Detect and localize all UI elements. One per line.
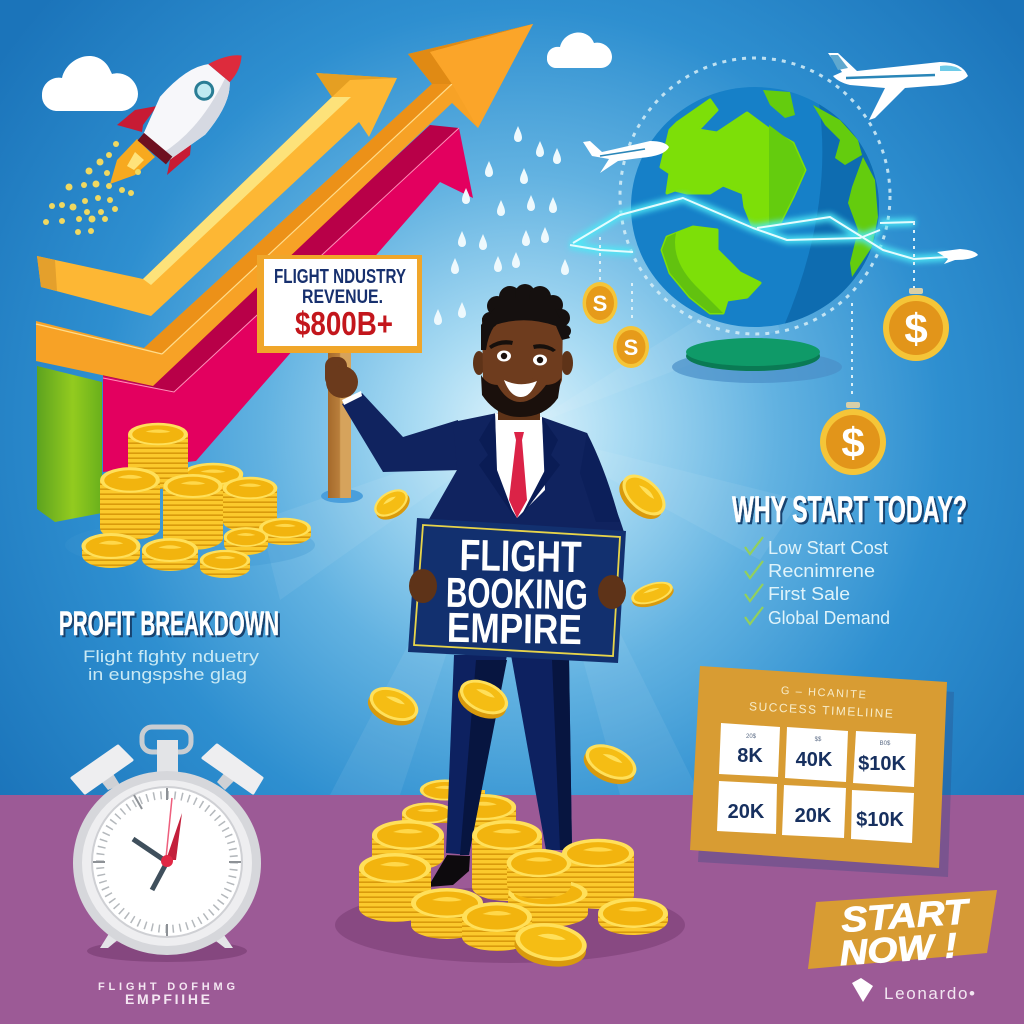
rocket sparks bbox=[43, 141, 141, 235]
checklist: Global Demand bbox=[768, 608, 890, 628]
light rays bbox=[260, 280, 800, 795]
water drops bbox=[434, 126, 569, 325]
coin strings bbox=[600, 222, 914, 398]
torso bbox=[420, 413, 625, 535]
continent: right bbox=[848, 157, 878, 277]
icon: plane small right bbox=[937, 249, 978, 264]
hanging coin small 1: S bbox=[593, 291, 607, 316]
timeline cell 40K bbox=[785, 727, 848, 782]
timeline title: G – HCANITE bbox=[781, 685, 866, 701]
timeline cell $10K first row: $10K bbox=[858, 753, 906, 775]
orange arrow bbox=[36, 24, 533, 386]
revenue sign: REVENUE. bbox=[302, 287, 383, 308]
clock shadow bbox=[87, 940, 247, 962]
text: footer brand: EMPFIIHE bbox=[125, 991, 210, 1007]
shirt bbox=[495, 413, 545, 518]
text: profit description: in eungspshe glag bbox=[88, 665, 247, 684]
timeline cell 8K bbox=[719, 723, 780, 777]
hanging coin small 1 bbox=[582, 282, 618, 324]
eyebrows bbox=[489, 340, 556, 352]
coin pile under feet: back bbox=[335, 780, 685, 963]
dotted orbit bbox=[620, 58, 890, 334]
continent: south bbox=[662, 227, 760, 313]
hanging coin large bottom bbox=[820, 402, 886, 475]
text: footer brand bbox=[98, 981, 235, 1007]
lapels bbox=[479, 413, 560, 518]
main title sign: FLIGHT bbox=[459, 531, 582, 582]
purple floor bbox=[0, 795, 1024, 1024]
timeline cell $10K second row: $10K bbox=[856, 809, 904, 831]
face bbox=[482, 318, 563, 415]
clock case bbox=[73, 771, 261, 955]
timeline cell $10K first row: B0$ bbox=[880, 741, 891, 747]
neck bbox=[498, 400, 540, 420]
clock hands bbox=[133, 839, 167, 890]
far arm bbox=[580, 433, 620, 522]
tie bbox=[509, 432, 527, 518]
businessman bbox=[325, 284, 625, 887]
heading: profit breakdown: PROFIT BREAKDOWN bbox=[59, 605, 279, 643]
floating coin left of suit bbox=[369, 484, 415, 525]
timeline cell 40K: 40K bbox=[796, 749, 833, 771]
clock handle bbox=[142, 727, 191, 752]
continent: upper bbox=[661, 100, 805, 227]
icon: cloud left bbox=[42, 56, 138, 111]
hanging coin large right bbox=[883, 288, 949, 361]
rocket flame bbox=[110, 139, 155, 184]
checklist: Recnimrene bbox=[768, 561, 875, 581]
clock bells bbox=[100, 772, 235, 790]
timeline cell 40K: $$ bbox=[815, 737, 822, 743]
icon: plane small left bbox=[583, 141, 669, 173]
main title sign bbox=[408, 518, 626, 663]
hanging coin large right: $ bbox=[904, 305, 928, 352]
continent: top bbox=[763, 90, 862, 165]
revenue sign: $800B+ bbox=[295, 305, 393, 342]
globe stand bbox=[672, 338, 842, 383]
trouser legs bbox=[446, 655, 572, 855]
timeline cell 8K: 20$ bbox=[746, 734, 757, 740]
text: profit description bbox=[83, 647, 260, 684]
call to action: start now: START bbox=[840, 892, 972, 940]
text: profit description: Flight flghty nduetry bbox=[83, 647, 260, 666]
call to action: start now bbox=[808, 890, 997, 973]
revenue sign bbox=[257, 255, 422, 353]
checklist: First Sale bbox=[768, 584, 850, 604]
main title sign: EMPIRE bbox=[446, 604, 582, 653]
hands on sign bbox=[409, 569, 626, 609]
ears bbox=[473, 351, 485, 375]
timeline cell 20K left: 20K bbox=[728, 801, 765, 823]
logo: Leonardo: Leonardo• bbox=[884, 984, 975, 1003]
hanging coin small 2 bbox=[613, 326, 649, 368]
checklist: Low Start Cost bbox=[768, 538, 888, 558]
yellow arrow bbox=[37, 73, 397, 316]
hair bbox=[481, 284, 571, 350]
timeline title bbox=[749, 683, 894, 721]
sign post bbox=[321, 350, 363, 503]
pink arrow bbox=[103, 125, 473, 472]
cuff bbox=[342, 391, 362, 405]
timeline cell 20K middle bbox=[782, 785, 846, 838]
smile bbox=[504, 380, 537, 397]
coin pile under feet: front bbox=[359, 820, 668, 971]
floating coins bbox=[363, 467, 676, 791]
rocket fins bbox=[117, 106, 192, 175]
icon: alarm clock bbox=[72, 727, 262, 962]
timeline cell $10K second row bbox=[851, 790, 914, 843]
icon: cloud right bbox=[547, 32, 612, 68]
eyes bbox=[497, 350, 547, 366]
globe bbox=[631, 87, 879, 327]
hanging coin small 2: S bbox=[624, 335, 638, 360]
clock ticks bbox=[100, 795, 234, 929]
logo: Leonardo bbox=[852, 978, 975, 1003]
revenue sign: FLIGHT NDUSTRY bbox=[274, 266, 406, 288]
shoe bbox=[428, 855, 470, 887]
timeline cell 8K: 8K bbox=[737, 745, 763, 767]
timeline cell 20K left bbox=[717, 781, 777, 834]
coin pile left bbox=[65, 423, 315, 578]
clock feet bbox=[100, 932, 233, 948]
raised arm bbox=[342, 393, 462, 472]
timeline cell 20K middle: 20K bbox=[795, 805, 832, 827]
timeline cell $10K first row bbox=[853, 731, 916, 787]
hanging coin large bottom: $ bbox=[841, 419, 865, 466]
flight route lines bbox=[570, 198, 947, 259]
icon: rocket bbox=[110, 32, 259, 184]
panel: success timeline bbox=[690, 666, 954, 877]
icon: plane large bbox=[828, 53, 968, 120]
chart: rising arrows bbox=[36, 24, 533, 522]
raised hand bbox=[325, 357, 358, 398]
green bar bbox=[37, 366, 102, 522]
timeline title: SUCCESS TIMELIINE bbox=[749, 699, 893, 721]
text: footer brand: FLIGHT DOFHMG bbox=[98, 981, 235, 993]
checklist bbox=[745, 537, 890, 628]
beard bbox=[481, 375, 561, 417]
main title sign: BOOKING bbox=[446, 569, 588, 618]
call to action: start now: NOW ! bbox=[838, 926, 959, 973]
